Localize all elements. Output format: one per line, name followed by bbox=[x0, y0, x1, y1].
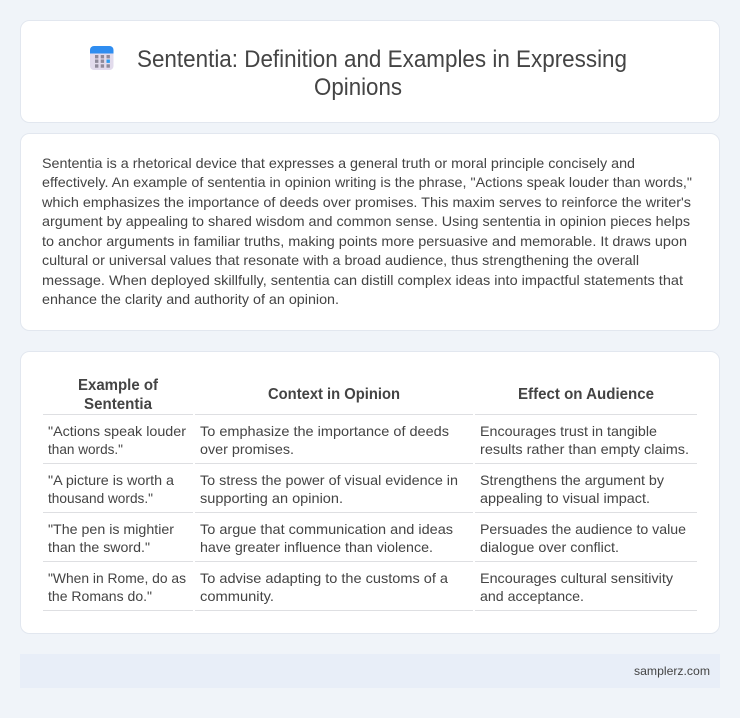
table row 3: than the sword." bbox=[48, 539, 150, 555]
footer bar bbox=[20, 654, 720, 688]
table row 4: "When in Rome, do as bbox=[48, 570, 186, 586]
panel: intro paragraph card bbox=[20, 134, 720, 330]
table row 1: than words." bbox=[48, 441, 123, 457]
table row 4 bbox=[43, 570, 697, 611]
table row 1: To emphasize the importance of deeds bbox=[200, 423, 449, 439]
table row 4: and acceptance. bbox=[480, 588, 584, 604]
text block: definition paragraph: enhance the clarity and authority of an opinion. bbox=[42, 291, 339, 307]
text block: definition paragraph: argument by appealing to shared wisdom and common sense. Using sententia in opinion pieces helps bbox=[42, 213, 690, 229]
table row 2: thousand words." bbox=[48, 490, 153, 506]
table header row: Example of bbox=[78, 377, 159, 394]
table header row: Sententia bbox=[84, 396, 152, 413]
table row 2: To stress the power of visual evidence in bbox=[200, 472, 458, 488]
text block: definition paragraph: effectively. An example of sententia in opinion writing is the phrase, "Actions speak louder than words," bbox=[42, 174, 692, 190]
table row 2 bbox=[43, 472, 697, 513]
table row 4: the Romans do." bbox=[48, 588, 152, 604]
table row 1: results rather than empty claims. bbox=[480, 441, 689, 457]
table row 2: "A picture is worth a bbox=[48, 472, 174, 488]
table row 4: Encourages cultural sensitivity bbox=[480, 570, 673, 586]
panel: title card bbox=[20, 20, 720, 122]
text block: definition paragraph bbox=[41, 155, 692, 307]
table header row: Context in Opinion bbox=[268, 386, 400, 403]
table row 3: "The pen is mightier bbox=[48, 521, 174, 537]
text block: definition paragraph: which emphasizes the importance of deeds over promises. This maxim serves to reinforce the writer's bbox=[41, 194, 691, 210]
text block: definition paragraph: cultural or universal values that resonate with a broad audience, thus strengthening the overall bbox=[42, 252, 639, 268]
table header row bbox=[43, 377, 697, 415]
table row 2: Strengthens the argument by bbox=[480, 472, 664, 488]
title: Opinions bbox=[314, 74, 402, 101]
table row 4: community. bbox=[200, 588, 274, 604]
title: Sententia: Definition and Examples in Expressing bbox=[137, 46, 627, 73]
table row 2: supporting an opinion. bbox=[200, 490, 343, 506]
table row 3: Persuades the audience to value bbox=[480, 521, 686, 537]
table row 1 bbox=[43, 423, 697, 464]
table row 2: appealing to visual impact. bbox=[480, 490, 650, 506]
text block: definition paragraph: to anchor arguments in familiar truths, making points more persuasive and memorable. It draws upon bbox=[42, 233, 687, 249]
table row 3 bbox=[43, 521, 697, 562]
panel: table card bbox=[20, 352, 720, 634]
icon: calendar bbox=[90, 46, 114, 70]
footer bar: samplerz.com bbox=[634, 664, 710, 678]
text block: definition paragraph: Sententia is a rhetorical device that expresses a general truth or moral principle concisely and bbox=[42, 155, 635, 171]
table row 1: over promises. bbox=[200, 441, 294, 457]
table row 1: "Actions speak louder bbox=[48, 423, 186, 439]
table row 3: dialogue over conflict. bbox=[480, 539, 619, 555]
table row 3: have greater influence than violence. bbox=[200, 539, 433, 555]
title bbox=[137, 46, 627, 101]
text block: definition paragraph: message. When deployed skillfully, sententia can distill complex ideas into impactful statements that bbox=[42, 272, 683, 288]
table row 1: Encourages trust in tangible bbox=[480, 423, 657, 439]
table header row: Effect on Audience bbox=[518, 386, 654, 403]
table row 4: To advise adapting to the customs of a bbox=[200, 570, 448, 586]
table row 3: To argue that communication and ideas bbox=[200, 521, 453, 537]
